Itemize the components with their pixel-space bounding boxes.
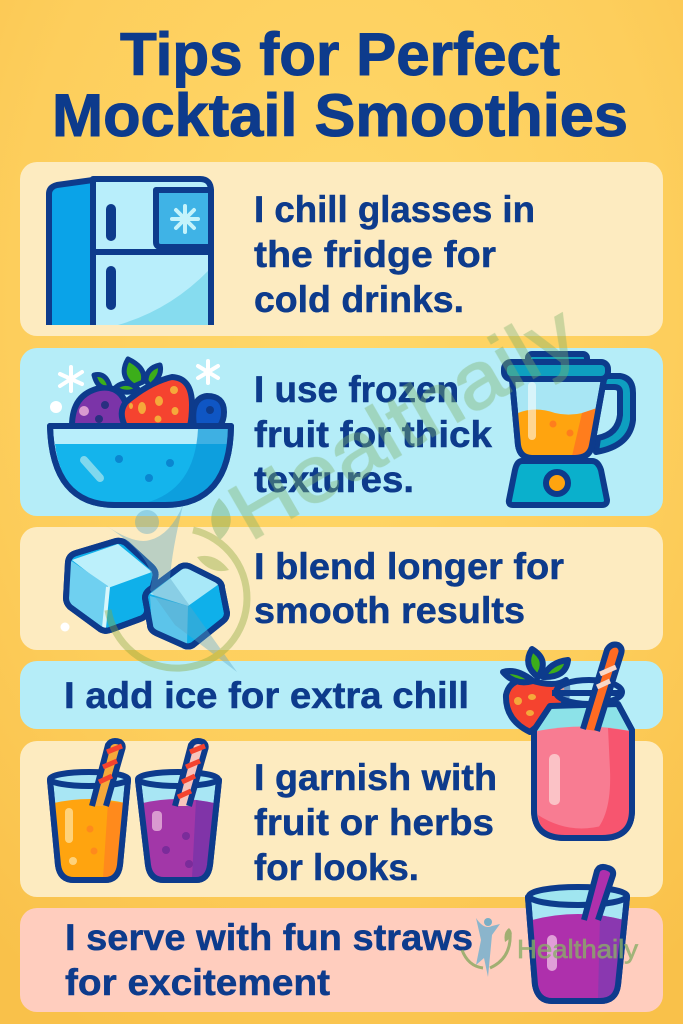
text: fun straws: I serve with fun straws — [65, 917, 473, 958]
icon: blender — [504, 354, 633, 505]
text: fun straws: for excitement — [65, 962, 330, 1003]
panel: garnish — [20, 741, 663, 897]
text: garnish: I garnish with — [254, 757, 497, 798]
watermark: small logo: Healthaily — [517, 934, 638, 964]
text: frozen fruit: I use frozen — [254, 369, 459, 410]
text: garnish: for looks. — [254, 847, 419, 888]
text: chill glasses: the fridge for — [254, 234, 496, 275]
icon: purple smoothie glass — [528, 867, 627, 1001]
panel: fun straws — [20, 867, 663, 1012]
icon: fruit bowl — [50, 359, 231, 505]
text: blend longer — [254, 546, 564, 631]
watermark: small logo — [462, 918, 638, 977]
text: blend longer: I blend longer for — [254, 546, 564, 587]
icon: ice cubes — [60, 541, 227, 646]
watermark: large: Healthaily — [214, 287, 592, 557]
icon: two smoothie glasses — [50, 741, 219, 880]
text: garnish — [254, 757, 497, 888]
text: chill glasses: I chill glasses in — [254, 189, 535, 230]
text: blend longer: smooth results — [254, 590, 525, 631]
text: chill glasses: cold drinks. — [254, 279, 464, 320]
text: fun straws — [65, 917, 473, 1003]
icon: fridge — [49, 179, 212, 325]
text: chill glasses — [254, 189, 535, 320]
text: garnish: fruit or herbs — [254, 802, 494, 843]
icon: smoothie jar with strawberry — [503, 645, 632, 838]
text: add ice: I add ice for extra chill — [64, 675, 469, 716]
panel: chill glasses — [20, 162, 663, 336]
panel: add ice — [20, 661, 663, 729]
watermark: large — [105, 287, 592, 672]
text: frozen fruit: textures. — [254, 459, 414, 500]
panel: frozen fruit — [20, 348, 663, 516]
title — [52, 21, 628, 149]
panel: blend longer — [20, 527, 663, 650]
title: Mocktail Smoothies — [52, 82, 628, 149]
title: Tips for Perfect — [120, 21, 560, 88]
text: frozen fruit — [254, 369, 492, 500]
text: frozen fruit: fruit for thick — [254, 414, 492, 455]
